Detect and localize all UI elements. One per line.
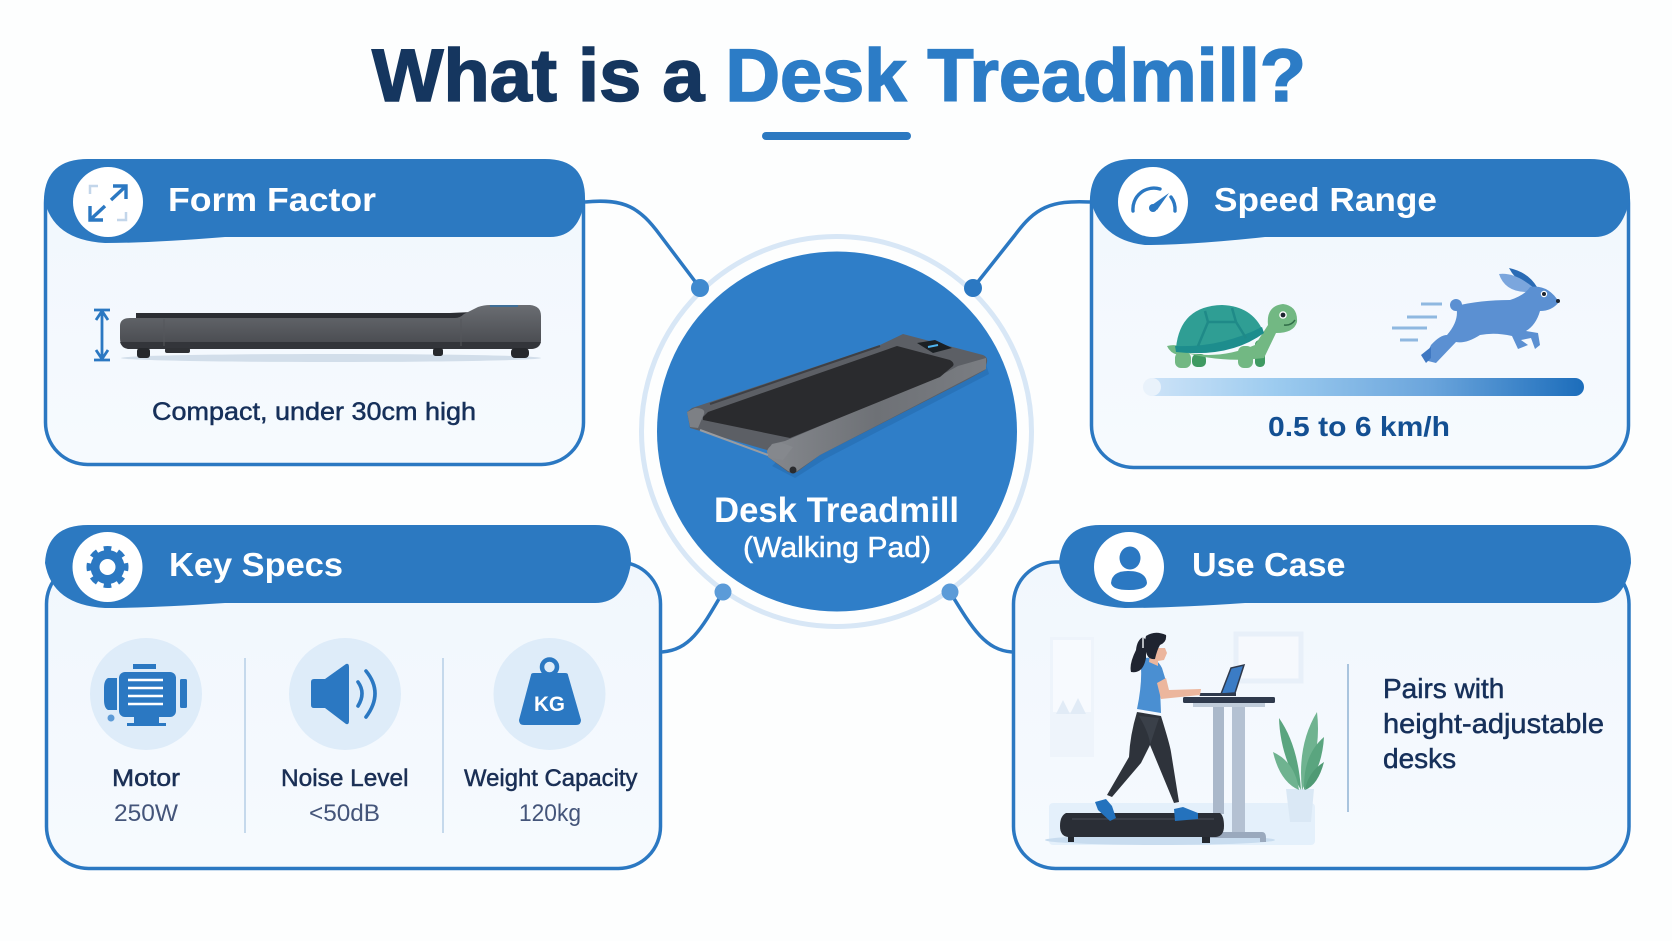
- panel: Use Case: [1014, 525, 1631, 868]
- title underline: [762, 132, 911, 140]
- icon: speedometer: [1118, 167, 1188, 237]
- centre disc: [657, 252, 1017, 612]
- connector: key specs to centre: [662, 592, 723, 652]
- card background: [46, 562, 660, 868]
- title: What is a Desk Treadmill?: [372, 34, 1306, 117]
- centre label: Desk Treadmill: [714, 491, 959, 530]
- spec: noise level: Noise Level: [281, 765, 408, 792]
- card background: [1014, 562, 1629, 868]
- speed gradient bar: [1143, 378, 1584, 396]
- spec: weight capacity: KG: [534, 693, 565, 716]
- header band: [44, 159, 585, 243]
- description: height-adjustable: [1383, 708, 1604, 739]
- divider: [1347, 664, 1349, 812]
- spec: weight capacity: Weight Capacity: [464, 765, 638, 792]
- icon: running rabbit with speed lines: [1392, 268, 1560, 363]
- spec: weight capacity: [464, 638, 638, 827]
- caption: Compact, under 30cm high: [152, 398, 476, 426]
- icon: turtle: [1167, 304, 1297, 368]
- spec: motor: 250W: [114, 800, 178, 827]
- heading: Use Case: [1192, 546, 1346, 583]
- connector: form factor to centre: [585, 201, 700, 288]
- treadmill render: [687, 334, 989, 478]
- spec: weight capacity: 120kg: [519, 800, 581, 827]
- centre hub: [642, 236, 1032, 626]
- header band: [1090, 159, 1630, 245]
- speed value: 0.5 to 6 km/h: [1268, 411, 1450, 442]
- description: desks: [1383, 743, 1456, 774]
- illustration: woman walking at standing desk: [1045, 633, 1324, 845]
- card background: [1092, 161, 1628, 468]
- panel: Key Specs: [45, 525, 660, 868]
- icon: gear: [72, 532, 142, 602]
- spec: noise level: [281, 638, 408, 827]
- panel: Form Factor: [44, 159, 585, 464]
- side view treadmill: [120, 305, 541, 362]
- spec: motor: Motor: [112, 765, 180, 792]
- heading: Speed Range: [1214, 181, 1437, 218]
- panel: Speed Range: [1090, 159, 1630, 468]
- spec: motor: [90, 638, 202, 827]
- heading: Form Factor: [168, 181, 376, 218]
- connector dots: [691, 279, 982, 600]
- card background: [46, 161, 584, 464]
- connector: use case to centre: [950, 592, 1012, 652]
- centre sublabel: (Walking Pad): [743, 532, 931, 564]
- icon: person: [1094, 532, 1164, 602]
- header band: [1059, 525, 1631, 608]
- heading: Key Specs: [169, 546, 343, 583]
- outer ring: [642, 236, 1032, 626]
- spec: noise level: <50dB: [309, 800, 380, 827]
- connector: speed range to centre: [973, 202, 1090, 288]
- description: Pairs with: [1383, 673, 1504, 704]
- icon: height arrow: [94, 310, 110, 360]
- header band: [45, 525, 631, 608]
- icon: resize arrows: [73, 167, 143, 237]
